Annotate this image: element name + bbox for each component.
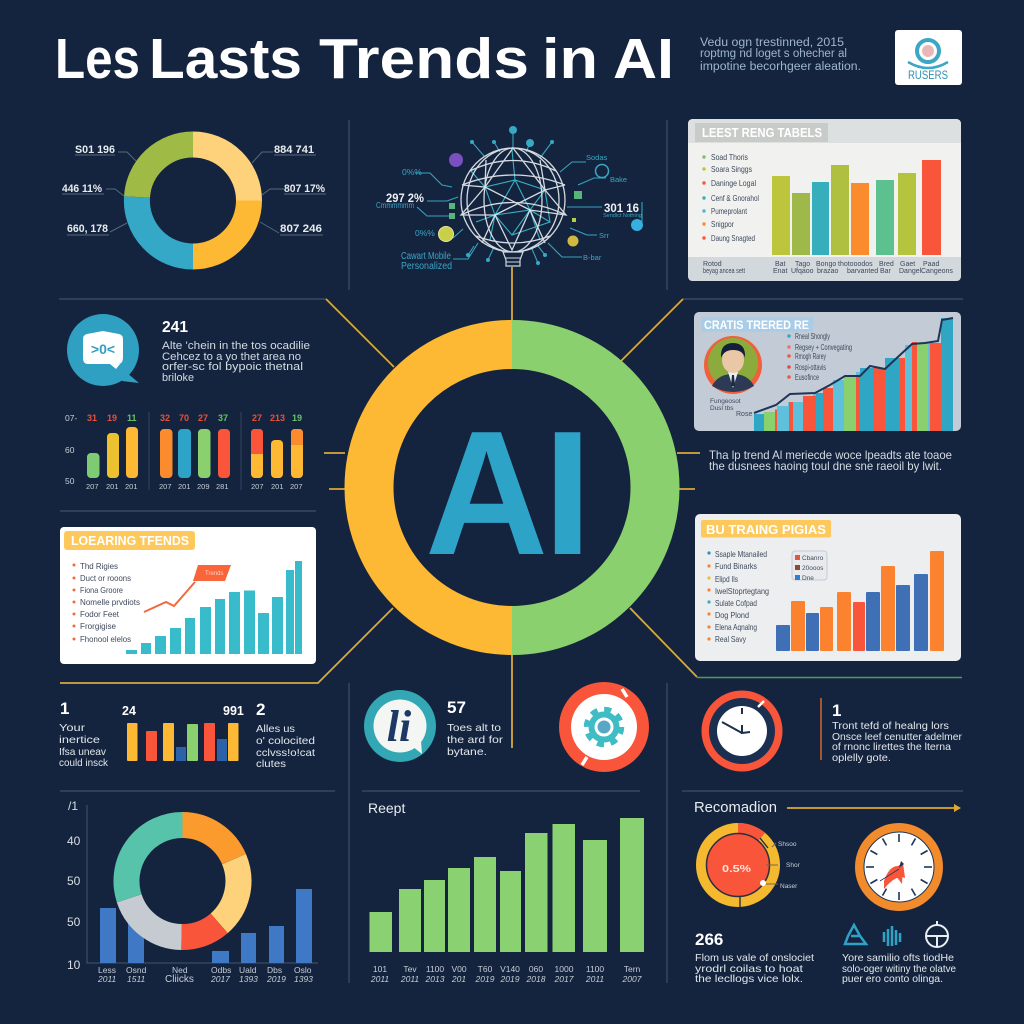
icon: portrait: [704, 336, 762, 394]
icon: wireframe globe light bulb: Srr: [599, 231, 610, 240]
chart: donut over blue bars: Osnd: [126, 965, 147, 975]
chart: green bars: 2011: [585, 974, 604, 984]
panel: least reng tables: Soad Thoris: [711, 152, 748, 162]
legend box: [792, 551, 827, 582]
panel: bu training pigias: Fund Binarks: [715, 561, 757, 571]
header note: impotine becorhgeer aleation.: [700, 61, 861, 73]
chart: donut over blue bars: Oslo: [294, 965, 312, 975]
panel: least reng tables: thotooodos: [838, 261, 873, 268]
stat: 241: briloke: [162, 372, 194, 384]
chart: green bars: 101: [373, 964, 387, 974]
panel: cratis trends: Rospi-ottavis: [795, 362, 826, 372]
legend box: Dne: [802, 575, 814, 582]
icon: wireframe globe light bulb: Cawart Mobile: [401, 251, 451, 262]
icon: wireframe globe light bulb: 0%%: [415, 228, 435, 238]
header note: Vedu ogn trestinned, 2015: [700, 37, 844, 49]
stat: 57: [447, 698, 504, 758]
chart: donut over blue bars: 10: [67, 958, 81, 972]
stat: item 1 with bars and item 2: could insck: [59, 757, 109, 769]
chart: donut over blue bars: 2019: [266, 974, 286, 984]
chart: donut over blue bars: 1511: [127, 974, 146, 984]
grouped bar charts: 209: [197, 482, 210, 491]
gauge: 0.5% donut: Shor: [786, 862, 801, 869]
grouped bar charts: 213: [270, 413, 285, 423]
panel: least reng tables: Daninge Logal: [711, 178, 756, 188]
chart: green bars: 2013: [425, 974, 445, 984]
chart: donut over blue bars: Cliicks: [165, 974, 194, 985]
chart: green bars: V00: [451, 964, 467, 974]
grouped bar charts: 27: [198, 413, 208, 423]
panel: least reng tables: Bar: [880, 268, 892, 275]
AI lettering: A: [425, 394, 548, 592]
text block: closing note: puer ero conto olinga.: [842, 973, 943, 985]
icon: wireframe globe light bulb: Personalized: [401, 261, 452, 272]
text block: trend caption: [709, 448, 952, 473]
panel: least reng tables: barvanted: [847, 268, 878, 275]
icon: wireframe globe light bulb: Sodas: [586, 153, 608, 162]
legend box: 20ooos: [802, 565, 824, 572]
header note: [700, 37, 861, 73]
donut chart: top left: 807 17%: [284, 183, 325, 195]
stat: 266: yrodrl coilas to hoat: [695, 963, 803, 975]
gauge: 0.5% donut: Shsoo: [778, 841, 797, 848]
panel: locating trends: Fhonool elelos: [80, 634, 131, 644]
legend box: Cbanro: [802, 555, 824, 562]
grouped bar charts: [65, 412, 303, 491]
panel: cratis trends: Rose: [736, 411, 752, 418]
chat bubble icon: >0<: [91, 341, 115, 357]
grouped bar charts: 31: [87, 413, 97, 423]
stat: item 1 with bars and item 2: Your: [59, 722, 86, 734]
chart: donut over blue bars: Uald: [239, 965, 257, 975]
chart: green bars: 2018: [526, 974, 546, 984]
panel: cratis trends: Rneal Shongly: [795, 331, 830, 341]
grouped bar charts: 207: [251, 482, 264, 491]
chart: donut over blue bars: Less: [98, 965, 116, 975]
icons: row of three: [845, 921, 948, 947]
chart: donut over blue bars: 50: [67, 874, 81, 888]
panel: least reng tables: Pumeprolant: [711, 206, 747, 216]
title: Les: [55, 27, 140, 91]
grouped bar charts: 19: [107, 413, 117, 423]
grouped bar charts: 201: [271, 482, 284, 491]
chart: green bars: T60: [478, 964, 493, 974]
chart: green bars: [368, 800, 644, 984]
central connector lines: [60, 267, 700, 748]
panel: bu training pigias: Ssaple Mtanailed: [715, 549, 767, 559]
panel: least reng tables: Cenf & Gnorahol: [711, 193, 759, 203]
stat: item 1 right: [821, 698, 962, 764]
stat: item 1 with bars and item 2: Alles us: [256, 723, 295, 735]
icon: wireframe globe light bulb: Bake: [610, 175, 627, 184]
stat: 241: Alte 'chein in the tos ocadilie: [162, 340, 310, 352]
panel: least reng tables: Ufqaoo: [791, 268, 814, 275]
panel: least reng tables: Tago: [795, 261, 810, 268]
icon: wireframe globe light bulb: 297 2%: [386, 193, 424, 205]
panel: bu training pigias: Sulate Cofpad: [715, 598, 757, 608]
stat: item 1 with bars and item 2: cclvss!o!cat: [256, 747, 315, 759]
stat: item 1 right: Tront tefd of healng lors: [832, 720, 949, 732]
panel: locating trends: Fodor Feet: [80, 609, 120, 619]
panel: locating trends: Thd Rigies: [80, 561, 118, 571]
text block: trend caption: the dusnees haoing toul dne sne raeoil by lwit.: [709, 459, 942, 473]
chart: donut over blue bars: [67, 799, 318, 985]
panel heading: BU TRAING PIGIAS: [706, 522, 826, 537]
panel: least reng tables: Snigpor: [711, 219, 734, 229]
chart: green bars: 060: [529, 964, 543, 974]
grouped bar charts: 37: [218, 413, 228, 423]
chart: green bars: 1100: [586, 964, 604, 974]
panel: least reng tables: Rotod: [703, 261, 722, 268]
chart: donut over blue bars: Odbs: [211, 965, 231, 975]
stat: 266: [695, 930, 814, 985]
icon: wireframe globe light bulb: Cmmmmmm: [376, 200, 414, 210]
stat: 241: [162, 319, 310, 384]
donut chart: top left: 884 741: [274, 144, 314, 156]
panel: cratis trends: Eusofince: [795, 372, 819, 382]
panel: least reng tables: Cangeons: [921, 268, 953, 275]
heading: recommendation with arrow: Recomadion: [694, 800, 777, 816]
grouped bar charts: 60: [65, 445, 75, 455]
chart: donut over blue bars: 2017: [210, 974, 230, 984]
stat: item 1 right: oplelly gote.: [832, 752, 891, 764]
gauge: 0.5% donut: Naser: [780, 883, 798, 890]
chart: donut over blue bars: /1: [68, 799, 78, 813]
icon: li badge: [364, 690, 436, 762]
grouped bar charts: 207: [290, 482, 303, 491]
stat: 57: Toes alt to: [447, 722, 501, 734]
panel: cratis trends: Dusl tbs: [710, 405, 734, 412]
stat: 241: Cehcez to a yo thet area no: [162, 351, 301, 363]
stat: 241: 241: [162, 319, 188, 336]
panel: bu training pigias: Dog Plond: [715, 610, 749, 620]
panel: locating trends: Duct or rooons: [80, 573, 131, 583]
title: Lasts: [149, 27, 302, 91]
chart: green bars: 2007: [622, 974, 642, 984]
chart: green bars: 2011: [400, 974, 419, 984]
donut chart: top left: 446 11%: [62, 183, 102, 195]
panel: least reng tables: Gaet: [900, 261, 915, 268]
text block: closing note: solo-oger witiny the olatve: [842, 963, 956, 975]
panel heading: LOEARING TFENDS: [71, 534, 189, 548]
panel: least reng tables: Daung Snagted: [711, 233, 755, 243]
title: AI: [613, 27, 674, 91]
chart: green bars: 2017: [554, 974, 574, 984]
panel: cratis trends: Regsey + Convegating: [795, 342, 852, 352]
gauge: 0.5% donut: 0.5%: [722, 863, 752, 875]
grouped bar charts: 281: [216, 482, 229, 491]
donut chart: top left: 807 246: [280, 223, 322, 235]
chart: donut over blue bars: Dbs: [267, 965, 282, 975]
stat: item 1 with bars and item 2: 1: [60, 699, 69, 718]
chart: donut over blue bars: 40: [67, 834, 81, 848]
donut chart: top left: [62, 144, 326, 257]
grouped bar charts: 07-: [65, 413, 77, 423]
panel: least reng tables: Bred: [879, 261, 894, 268]
logo: [895, 30, 962, 85]
chart: green bars: 2019: [475, 974, 495, 984]
stat: 266: Flom us vale of onslociet: [695, 952, 814, 964]
panel: cratis trends: [694, 312, 961, 431]
panel: bu training pigias: Elipd Ils: [715, 574, 738, 584]
grouped bar charts: 201: [125, 482, 138, 491]
stat: 266: the lecllogs vice lolx.: [695, 973, 803, 985]
chart: green bars: Reept: [368, 800, 405, 816]
stat: item 1 with bars and item 2: [59, 699, 315, 770]
grouped bar charts: 207: [159, 482, 172, 491]
title: in: [542, 27, 598, 91]
text block: closing note: [842, 952, 956, 985]
chart: green bars: V140: [500, 964, 520, 974]
chart: green bars: 2011: [370, 974, 389, 984]
chart: green bars: 2019: [500, 974, 520, 984]
panel heading: CRATIS TRERED RE: [704, 318, 809, 332]
panel: bu training pigias: Real Savy: [715, 634, 747, 644]
chart: green bars: 1000: [555, 964, 574, 974]
grouped bar charts: 201: [106, 482, 119, 491]
stat: 57: bytane.: [447, 746, 487, 758]
stat: 57: the ard for: [447, 734, 504, 746]
grouped bar charts: 70: [179, 413, 189, 423]
panel: locating trends: Trends: [205, 571, 223, 577]
icon: wireframe globe light bulb: Sendict Nothing: [603, 213, 642, 219]
AI lettering: I: [543, 394, 592, 592]
panel: least reng tables: Soara Singgs: [711, 164, 752, 174]
stat: 241: orfer-sc fol bypoic thetnal: [162, 361, 303, 373]
stat: item 1 right: of rnonc lirettes the lterna: [832, 741, 951, 753]
stat: item 1 with bars and item 2: clutes: [256, 758, 286, 770]
stat: item 1 with bars and item 2: Ifsa uneav: [59, 746, 107, 758]
panel: least reng tables: beyag ancea sett: [703, 268, 745, 275]
panel: cratis trends: Rmogh Rarey: [795, 351, 826, 361]
panel heading: [695, 123, 828, 142]
panel: locating trends: Fiona Groore: [80, 585, 123, 595]
grouped bar charts: 207: [86, 482, 99, 491]
panel heading: [64, 531, 195, 550]
text block: closing note: Yore samilio ofts tiodHe: [842, 952, 954, 964]
panel: bu training pigias: Elena Aqnalng: [715, 622, 757, 632]
stat: item 1 right: 1: [832, 701, 841, 720]
panel: bu training pigias: [695, 514, 961, 661]
panel: least reng tables: Bongo: [816, 261, 836, 268]
stat: item 1 with bars and item 2: inertice: [59, 734, 100, 746]
gauge: 0.5% donut: [701, 828, 801, 907]
icon: wireframe globe light bulb: [376, 126, 643, 272]
panel: cratis trends: Fungeosot: [710, 398, 741, 405]
stat: item 1 with bars and item 2: 24: [122, 704, 136, 718]
chart: donut over blue bars: 1393: [239, 974, 258, 984]
grouped bar charts: 50: [65, 476, 75, 486]
chart: donut over blue bars: 1393: [294, 974, 313, 984]
central ring: [369, 344, 655, 630]
chat bubble icon: [67, 314, 139, 386]
panel: least reng tables: Dangel: [899, 268, 922, 275]
text block: trend caption: Tha lp trend Al meriecde woce lpeadts ate toaoe: [709, 448, 952, 462]
stat: 57: 57: [447, 698, 466, 717]
icon: stopwatch: [702, 690, 782, 772]
grouped bar charts: 19: [292, 413, 302, 423]
panel: bu training pigias: IwelStoprtegtang: [715, 586, 769, 596]
icon: li badge: li: [387, 702, 412, 751]
panel: least reng tables: [688, 119, 961, 281]
icon: gear: [559, 682, 649, 772]
icon: wireframe globe light bulb: 301 16: [604, 203, 639, 215]
chart: donut over blue bars: 50: [67, 915, 81, 929]
panel: least reng tables: Paad: [923, 261, 939, 268]
stat: item 1 with bars and item 2: 991: [223, 704, 244, 718]
donut chart: top left: S01 196: [75, 144, 115, 156]
logo: RUSERS: [908, 68, 948, 82]
stat: item 1 with bars and item 2: o' colocited: [256, 735, 315, 747]
icon: wireframe globe light bulb: 0%%: [402, 167, 422, 177]
panel: least reng tables: Enat: [773, 268, 787, 275]
header note: roptmg nd loget s ohecher al: [700, 48, 847, 60]
title: Trends: [319, 27, 529, 91]
panel: least reng tables: Bat: [775, 261, 786, 268]
chart: donut over blue bars: 2011: [97, 974, 117, 984]
donut chart: top left: 660, 178: [67, 223, 108, 235]
chart: donut over blue bars: Ned: [172, 965, 188, 975]
grouped bar charts: 11: [127, 413, 137, 423]
panel heading: LEEST RENG TABELS: [702, 125, 822, 140]
stat: 266: 266: [695, 930, 723, 949]
chart: green bars: 201: [451, 974, 466, 984]
chart: green bars: Tev: [403, 964, 417, 974]
grouped bar charts: 201: [178, 482, 191, 491]
panel: locating trends: Nomelle prvdiots: [80, 597, 140, 607]
icon: wireframe globe light bulb: B-bar: [583, 253, 602, 262]
gauge: clock dial: [855, 823, 943, 911]
title: [55, 27, 674, 91]
grouped bar charts: 27: [252, 413, 262, 423]
panel: locating trends: Frorgigise: [80, 621, 116, 631]
grouped bar charts: 32: [160, 413, 170, 423]
stat: item 1 with bars and item 2: 2: [256, 700, 265, 719]
panel: locating trends: [60, 527, 316, 664]
stat: item 1 right: Onsce leef cenutter adelmer: [832, 731, 962, 743]
panel: least reng tables: brazao: [817, 268, 839, 275]
chart: green bars: Tern: [624, 964, 641, 974]
chart: green bars: 1100: [426, 964, 444, 974]
heading: recommendation with arrow: [694, 800, 961, 816]
